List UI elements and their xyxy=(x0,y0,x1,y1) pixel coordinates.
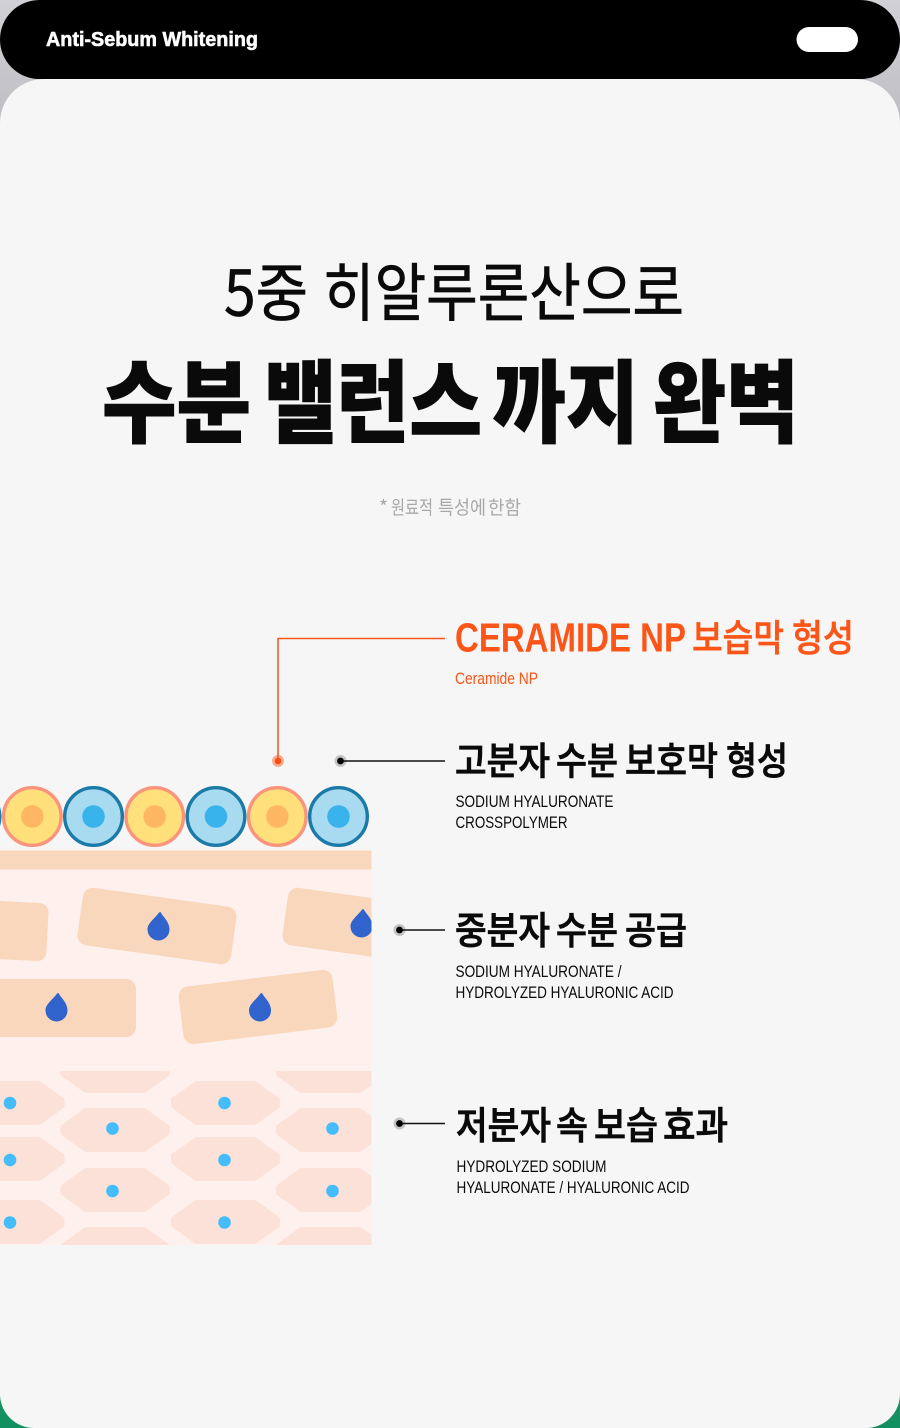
label: high molecular: 형성 xyxy=(726,730,788,786)
footnote: 특성에 xyxy=(438,493,486,520)
white pill xyxy=(796,27,858,52)
footnote: 한함 xyxy=(488,493,521,520)
heading line 1: 히알루론산으로 xyxy=(323,244,684,334)
label: low molecular: 보습 xyxy=(594,1095,658,1150)
label: low molecular: HYALURONATE / HYALURONIC ACID xyxy=(456,1178,690,1197)
brick cells xyxy=(0,888,372,1044)
callout line: ceramide xyxy=(272,638,445,767)
label: low molecular: HYDROLYZED SODIUM xyxy=(456,1157,606,1176)
label: high molecular: 수분 xyxy=(556,730,618,786)
hexagon cells xyxy=(0,1071,372,1245)
label: low molecular: 저분자 xyxy=(456,1095,551,1150)
label: ceramide: Ceramide NP xyxy=(455,669,538,688)
footnote: * xyxy=(379,493,388,520)
heading line 2 xyxy=(102,331,799,461)
label: high molecular: 고분자 xyxy=(455,730,550,786)
label: medium molecular xyxy=(455,900,687,1002)
top band xyxy=(0,850,372,870)
label: high molecular: SODIUM HYALURONATE xyxy=(456,792,614,811)
callout line: medium molecular xyxy=(394,924,445,936)
label: ceramide: 형성 xyxy=(792,608,854,662)
label: medium molecular: HYDROLYZED HYALURONIC ACID xyxy=(456,983,674,1002)
label: medium molecular: SODIUM HYALURONATE / xyxy=(456,962,622,981)
heading line 2: 까지 xyxy=(493,331,639,461)
panel: skin diagram xyxy=(0,850,372,1245)
heading line 2: 완벽 xyxy=(653,331,799,461)
label: high molecular: 보호막 xyxy=(625,730,718,786)
callout line: low molecular xyxy=(394,1118,445,1130)
hexagon dots xyxy=(4,1097,339,1229)
heading line 2: 수분 xyxy=(102,331,251,461)
pink dermis background xyxy=(0,870,372,1246)
label: medium molecular: 수분 xyxy=(556,900,618,955)
label: low molecular xyxy=(456,1095,728,1197)
heading line 2: 밸런스 xyxy=(264,331,482,461)
label: low molecular: 속 xyxy=(556,1095,588,1150)
panel: top black bar xyxy=(0,0,900,79)
footnote: 원료적 xyxy=(391,493,433,520)
surface cell row xyxy=(0,788,367,845)
label: medium molecular: 공급 xyxy=(625,900,687,955)
label: medium molecular: 중분자 xyxy=(455,900,550,955)
footnote xyxy=(379,493,521,520)
label: low molecular: 효과 xyxy=(663,1095,728,1150)
water drops xyxy=(46,909,372,1022)
label: high molecular: CROSSPOLYMER xyxy=(456,813,568,832)
label: ceramide: 보습막 xyxy=(692,608,784,662)
callout line: high molecular xyxy=(334,755,445,767)
label: ceramide xyxy=(455,608,854,688)
bar title: Anti-Sebum Whitening xyxy=(46,28,258,51)
label: ceramide: CERAMIDE NP xyxy=(455,614,686,660)
label: high molecular xyxy=(455,730,788,832)
heading line 1: 5중 xyxy=(224,244,308,334)
